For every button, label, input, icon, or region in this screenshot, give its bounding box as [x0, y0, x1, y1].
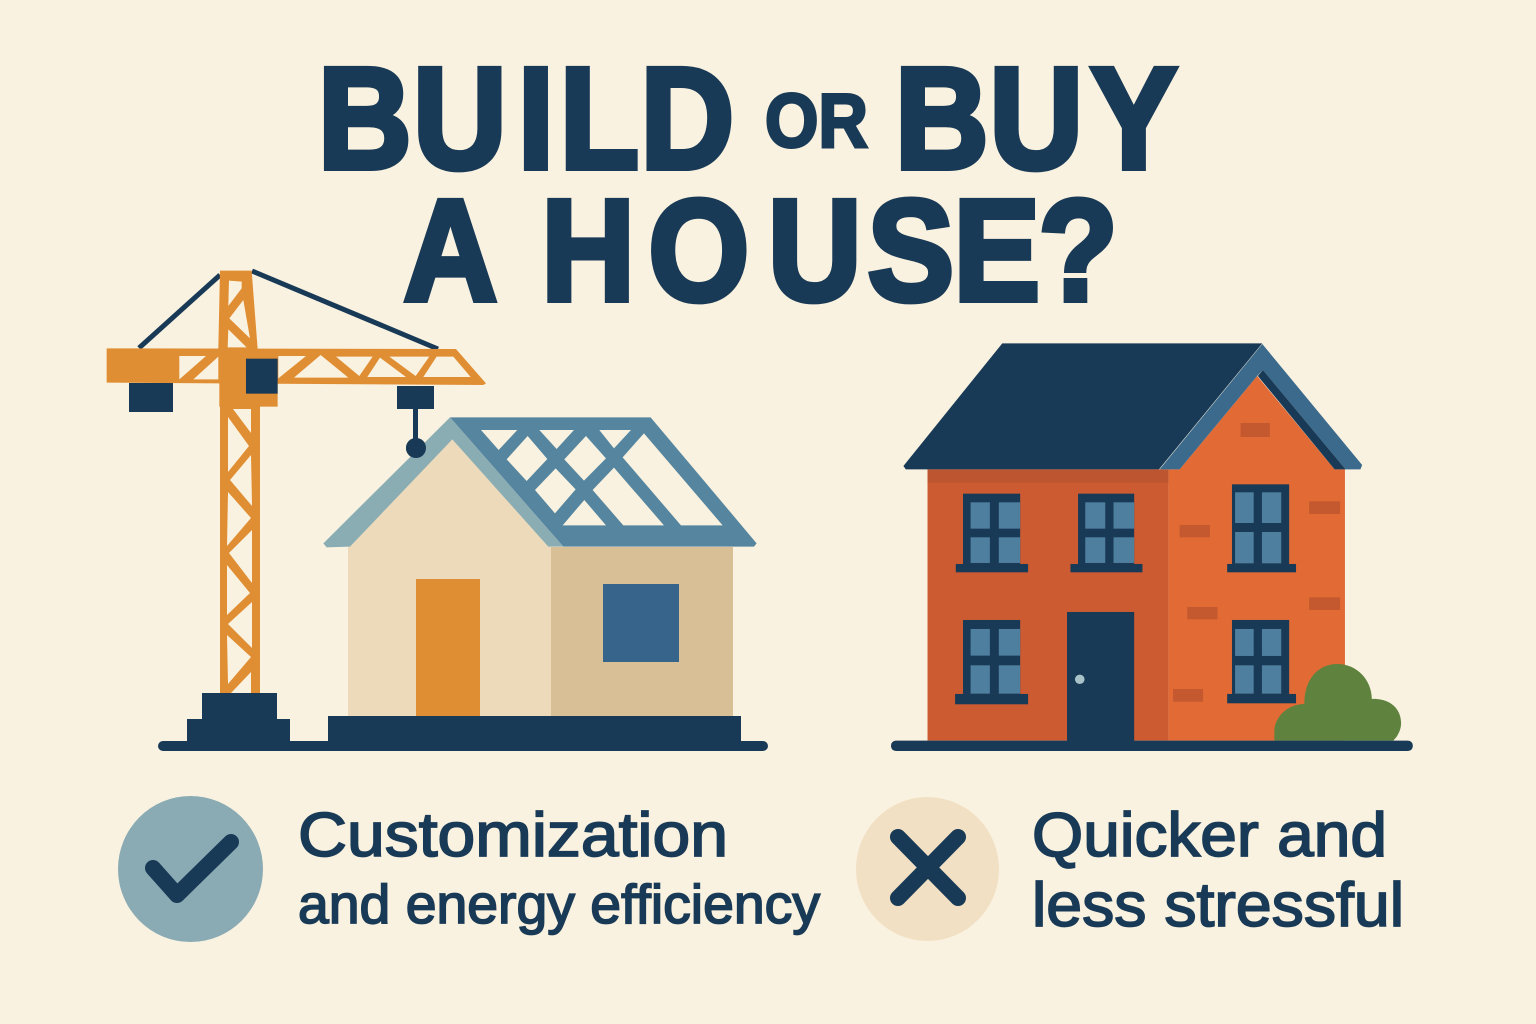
front door: [1067, 612, 1134, 751]
front wall: [928, 469, 1169, 741]
roof trim: [1160, 344, 1362, 469]
illustration: house under construction: [158, 417, 768, 751]
crane base: [187, 693, 290, 741]
title: [318, 39, 1177, 332]
text: quicker benefit: Quicker and: [1032, 801, 1387, 870]
illustration: finished brick house: [891, 343, 1413, 751]
text: customization benefit: Customization: [298, 801, 728, 870]
window lower right: [1227, 620, 1296, 703]
title word: BUY: BUY: [895, 39, 1177, 200]
front wall: [348, 437, 551, 716]
title line: A HOUSE?: A HOUSE?: [404, 171, 1118, 332]
repeated hook ball over roof: [406, 438, 426, 458]
illustration: tower crane: [107, 271, 486, 741]
gable wall: [1169, 376, 1345, 741]
title word: OR: OR: [765, 79, 868, 164]
ground line left: [158, 741, 768, 751]
text: customization benefit: and energy efficiency: [298, 873, 820, 935]
window upper middle: [1070, 494, 1142, 572]
bush: [1274, 664, 1401, 741]
door: [416, 579, 480, 716]
side wall: [551, 547, 733, 716]
icon: check mark badge: [118, 796, 263, 942]
bricks: [1173, 423, 1340, 702]
window lower left: [955, 620, 1028, 704]
icon: cross badge: [856, 797, 999, 941]
crane hook: [397, 386, 434, 458]
crane cables: [139, 271, 438, 349]
roof truss: [323, 417, 757, 547]
title word: BUILD: BUILD: [318, 39, 734, 200]
text: quicker benefit: [1032, 801, 1404, 940]
crane lower mast: [220, 405, 260, 693]
shadow band: [928, 470, 1169, 483]
roof gable edge: [323, 417, 563, 547]
window upper left: [956, 494, 1028, 572]
text: customization benefit: [298, 801, 820, 935]
window opening: [603, 584, 679, 662]
roof: [903, 343, 1262, 469]
window upper right: [1227, 484, 1296, 572]
foundation: [328, 716, 741, 746]
crane counterweight: [129, 383, 173, 412]
crane jib and upper mast: [107, 271, 486, 407]
ground line right: [891, 741, 1413, 751]
text: quicker benefit: less stressful: [1032, 871, 1404, 940]
